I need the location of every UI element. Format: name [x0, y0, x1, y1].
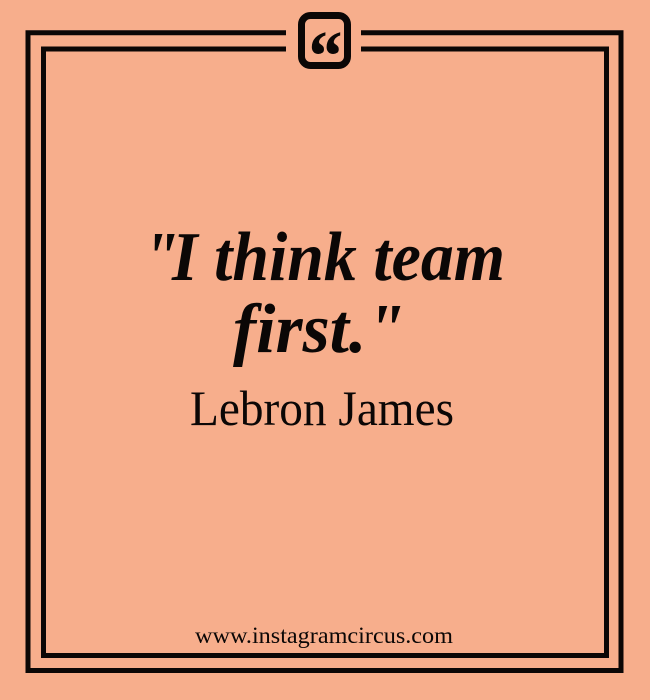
author name: Lebron James [190, 380, 454, 436]
quote text [143, 219, 505, 368]
quote text: " [143, 219, 179, 296]
icon: quotation mark badge: “ [305, 16, 341, 96]
quote text: first." [233, 291, 405, 368]
website footer: www.instagramcircus.com [195, 623, 453, 648]
quote text: I think team [171, 219, 505, 296]
